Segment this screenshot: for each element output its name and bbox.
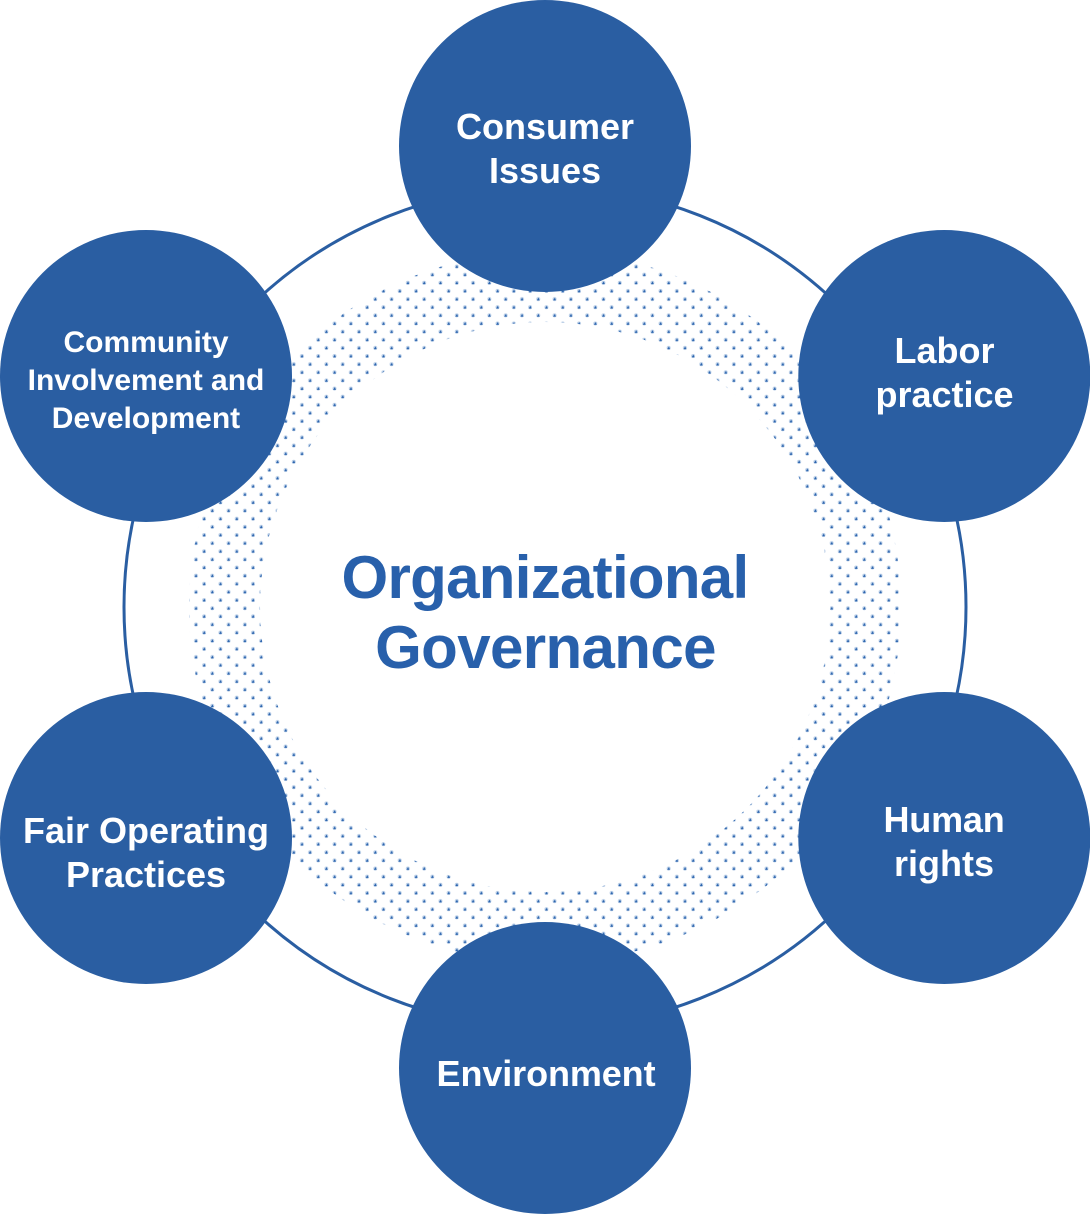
node: environment xyxy=(399,922,691,1214)
center title: Organizational xyxy=(342,544,748,611)
center title: Governance xyxy=(375,614,716,681)
node: labor practice: Labor xyxy=(894,330,995,371)
node: community involvement and development: Development xyxy=(52,402,240,435)
node: consumer issues: Issues xyxy=(489,150,601,191)
node: consumer issues: Consumer xyxy=(456,106,634,147)
node: human rights: Human xyxy=(883,799,1005,840)
node: community involvement and development: Community xyxy=(64,326,229,359)
dotted ring xyxy=(189,251,901,963)
node: fair operating practices xyxy=(0,692,292,984)
node: human rights: rights xyxy=(894,843,994,884)
node: labor practice: practice xyxy=(875,374,1014,415)
connecting ring line xyxy=(124,186,966,1028)
node: community involvement and development xyxy=(0,230,292,522)
center title xyxy=(342,544,748,681)
node: environment: Environment xyxy=(437,1053,656,1094)
node: consumer issues xyxy=(399,0,691,292)
node: community involvement and development: Involvement and xyxy=(28,364,264,397)
node: fair operating practices: Practices xyxy=(66,854,226,895)
node: fair operating practices: Fair Operating xyxy=(23,810,269,851)
node: labor practice xyxy=(798,230,1090,522)
node: human rights xyxy=(798,692,1090,984)
